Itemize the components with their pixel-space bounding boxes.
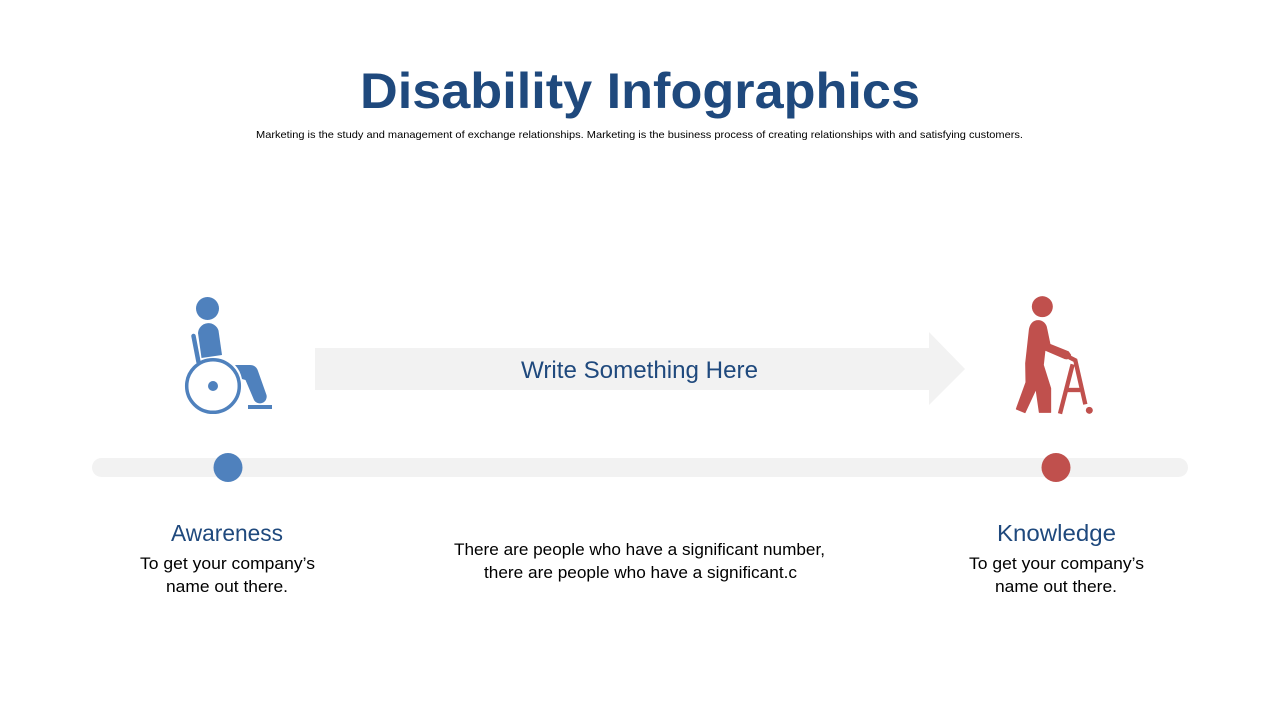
icon: person in wheelchair bbox=[187, 297, 272, 412]
arrow label: Write Something Here bbox=[521, 357, 758, 384]
arrow banner bbox=[315, 332, 965, 405]
text block: center description: There are people who have a significant number, bbox=[454, 540, 825, 559]
knowledge description: name out there. bbox=[995, 577, 1117, 596]
title: Disability Infographics bbox=[360, 63, 920, 119]
icon: person with walker bbox=[1016, 296, 1093, 414]
awareness description: name out there. bbox=[166, 577, 288, 596]
text block: center description: there are people who have a significant.c bbox=[484, 563, 798, 582]
awareness description: To get your company’s bbox=[140, 554, 315, 573]
knowledge heading: Knowledge bbox=[997, 520, 1116, 546]
timeline marker: knowledge bbox=[1042, 453, 1070, 482]
text block: knowledge bbox=[969, 520, 1144, 596]
awareness heading: Awareness bbox=[171, 520, 283, 546]
timeline bar bbox=[92, 458, 1188, 477]
text block: center description bbox=[454, 540, 825, 582]
subtitle: Marketing is the study and management of exchange relationships. Marketing is the business process of creating relationships with and satisfying customers. bbox=[256, 129, 1023, 141]
knowledge description: To get your company’s bbox=[969, 554, 1144, 573]
text block: awareness bbox=[140, 520, 315, 596]
timeline marker: awareness bbox=[214, 453, 242, 482]
knowledge description bbox=[969, 554, 1144, 596]
awareness description bbox=[140, 554, 315, 596]
